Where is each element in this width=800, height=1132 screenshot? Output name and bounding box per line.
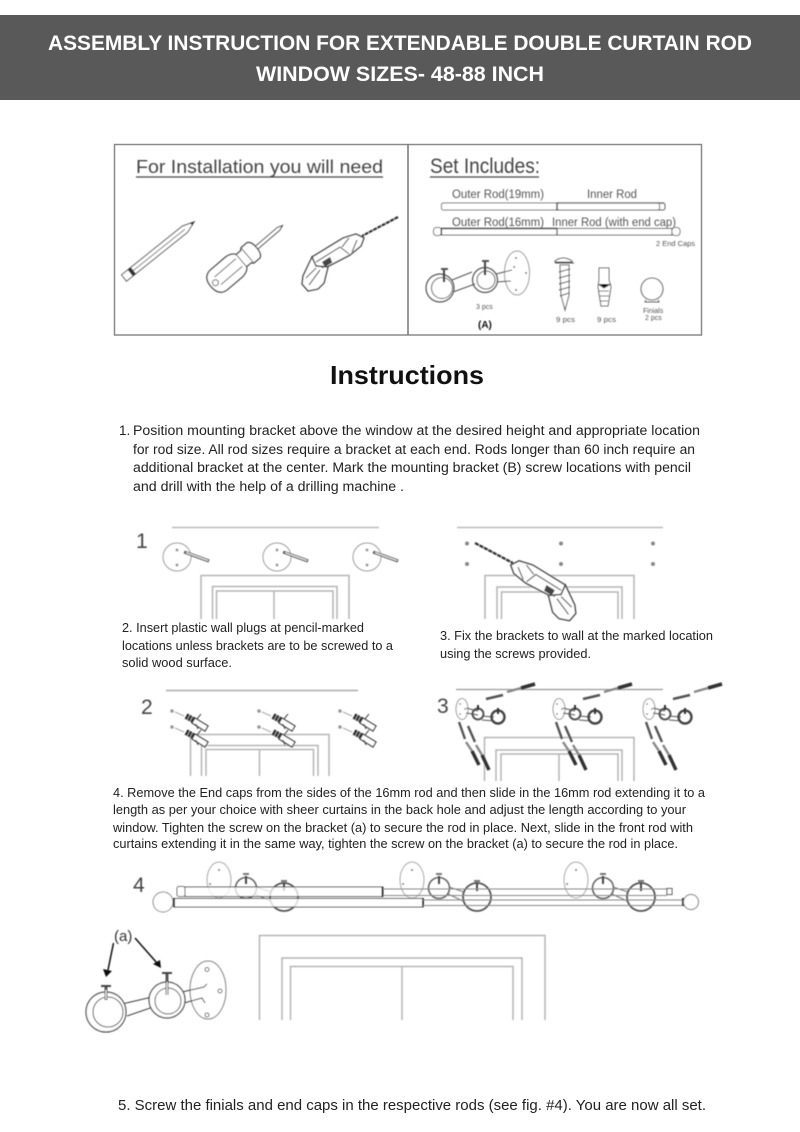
panel: tools and set contents bbox=[114, 144, 702, 335]
icon: double bracket (A): (A) bbox=[478, 320, 492, 331]
arrow to first screw bbox=[103, 943, 114, 977]
title line 1: ASSEMBLY INSTRUCTION FOR EXTENDABLE DOUBLE CURTAIN ROD bbox=[48, 31, 752, 55]
figure 4: assembled rods bbox=[133, 862, 698, 912]
panel: for installation you will need bbox=[121, 156, 398, 296]
bracket set right bbox=[643, 684, 722, 770]
figure 2: wall plugs bbox=[141, 690, 376, 776]
text block: step 3: 3. Fix the brackets to wall at the marked location bbox=[440, 629, 713, 643]
heading: instructions: Instructions bbox=[330, 360, 484, 390]
bracket set center bbox=[553, 684, 632, 770]
icon: wall plug bbox=[597, 268, 617, 324]
text block: step 1: for rod size. All rod sizes require a bracket at each end. Rods longer than 60 inch require an bbox=[133, 442, 695, 457]
text block: step 1: and drill with the help of a drilling machine . bbox=[133, 479, 404, 494]
text block: step 2: solid wood surface. bbox=[122, 656, 232, 670]
rod: 19mm outer and inner: Inner Rod bbox=[587, 189, 637, 201]
text block: step 5: 5. Screw the finials and end caps in the respective rods (see fig. #4). You are now all set. bbox=[118, 1097, 706, 1114]
text block: step 1: additional bracket at the center. Mark the mounting bracket (B) screw locations with pencil bbox=[133, 460, 691, 475]
callout: bracket detail (a) bbox=[86, 928, 226, 1032]
figure 1: marking bracket locations with pencil bbox=[136, 528, 398, 619]
figure number 2: 2 bbox=[141, 696, 153, 719]
text block: step 2: 2. Insert plastic wall plugs at pencil-marked bbox=[122, 621, 364, 635]
bracket outline right bbox=[353, 543, 398, 571]
icon: screwdriver bbox=[203, 216, 291, 296]
header banner bbox=[0, 15, 800, 100]
text block: step 4: curtains extending it in the same way, tighten the screw on the bracket (a) to secure the rod in place. bbox=[113, 837, 678, 851]
text block: step 1 bbox=[119, 423, 700, 494]
text block: step 2: locations unless brackets are to be screwed to a bbox=[122, 639, 393, 653]
rod: 19mm outer and inner bbox=[442, 189, 665, 210]
rod: 16mm outer and inner with end caps: Outer Rod(16mm) bbox=[452, 217, 544, 229]
rod: 16mm outer and inner with end caps bbox=[434, 217, 696, 248]
brackets behind rods bbox=[207, 862, 655, 911]
figure number 3: 3 bbox=[437, 695, 449, 718]
icon: wall plug: 9 pcs bbox=[597, 317, 617, 324]
icon: double bracket (A): 3 pcs bbox=[476, 304, 493, 311]
rod: 16mm outer and inner with end caps: 2 End Caps bbox=[656, 241, 696, 248]
icon: screw bbox=[555, 258, 576, 324]
figure 1b: drilling holes bbox=[457, 528, 663, 621]
window frame bbox=[190, 734, 329, 776]
panel: set includes bbox=[426, 155, 696, 331]
rod: 16mm outer and inner with end caps: Inner Rod (with end cap) bbox=[552, 217, 676, 229]
icon: finial bbox=[641, 278, 664, 322]
drill holes bbox=[465, 542, 655, 566]
text block: step 4 bbox=[112, 786, 705, 851]
figure 3: fixing brackets bbox=[437, 684, 722, 781]
figure number 4: 4 bbox=[133, 874, 145, 897]
text block: step 3: using the screws provided. bbox=[440, 647, 591, 661]
icon: screw: 9 pcs bbox=[556, 317, 576, 324]
text block: step 4: window. Tighten the screw on the bracket (a) to secure the rod in place. Next, slide in the front rod with bbox=[112, 821, 693, 835]
back rod bbox=[177, 886, 672, 897]
heading: set includes: Set Includes: bbox=[430, 155, 540, 178]
rod: 19mm outer and inner: Outer Rod(19mm) bbox=[452, 189, 544, 201]
callout: bracket detail (a): (a) bbox=[114, 928, 132, 945]
plugs center bbox=[273, 714, 295, 747]
text block: step 2 bbox=[122, 621, 393, 670]
icon: finial: Finials bbox=[643, 308, 664, 315]
text block: step 4: length as per your choice with sheer curtains in the back hole and adjust the length according to your bbox=[113, 803, 686, 817]
figure 4b: window frame bbox=[260, 936, 545, 1020]
plugs right bbox=[354, 714, 376, 747]
icon: pencil bbox=[121, 219, 197, 281]
window frame bbox=[484, 738, 634, 781]
icon: double bracket (A) bbox=[426, 251, 530, 331]
front rod bbox=[153, 892, 698, 912]
bracket outline center bbox=[263, 543, 308, 571]
bracket outline left bbox=[163, 543, 209, 571]
icon: drill on wall bbox=[475, 543, 576, 621]
arrow to second screw bbox=[135, 938, 161, 968]
title line 2: WINDOW SIZES- 48-88 INCH bbox=[256, 62, 544, 86]
bracket detail drawing bbox=[86, 961, 226, 1032]
icon: finial: 2 pcs bbox=[645, 315, 662, 322]
bracket set left bbox=[456, 684, 535, 770]
text block: step 3 bbox=[440, 629, 713, 661]
window frame bbox=[201, 576, 349, 619]
icon: power drill bbox=[302, 217, 398, 291]
figure number 1: 1 bbox=[136, 530, 148, 553]
text block: step 1: Position mounting bracket above the window at the desired height and appropriate location bbox=[133, 423, 700, 438]
text block: step 4: 4. Remove the End caps from the sides of the 16mm rod and then slide in the 16mm rod extending it to a bbox=[113, 786, 705, 800]
heading: for installation: For Installation you will need bbox=[136, 156, 383, 177]
text block: step 1: 1. bbox=[119, 423, 130, 438]
plugs left bbox=[186, 714, 208, 747]
